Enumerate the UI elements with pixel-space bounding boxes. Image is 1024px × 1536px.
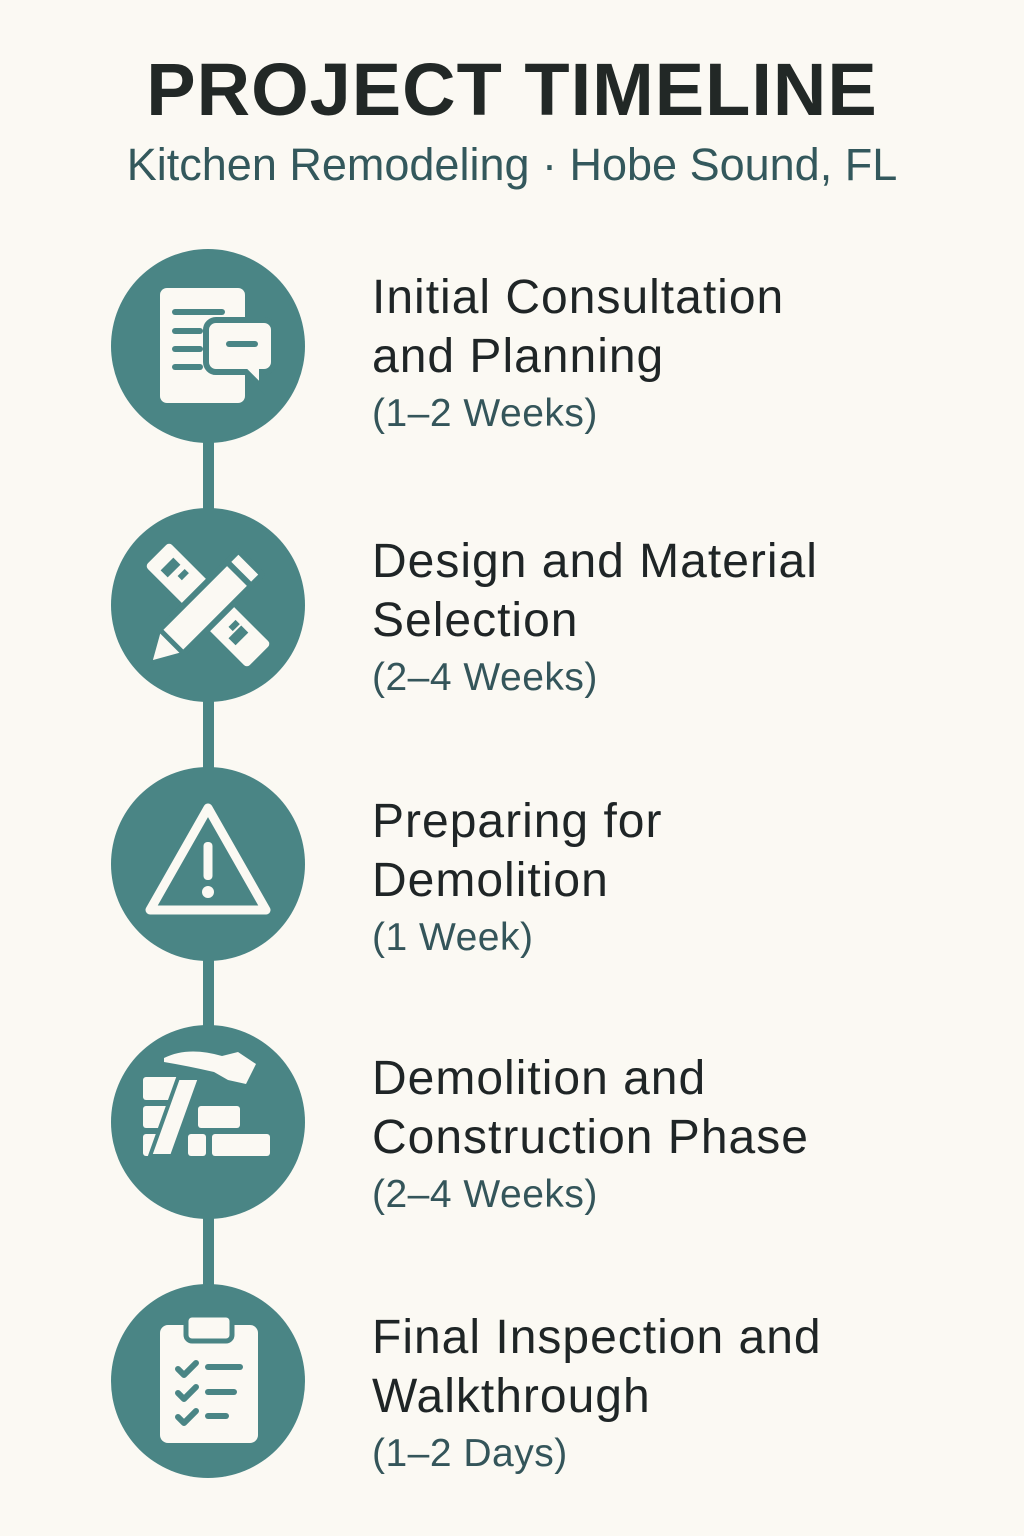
step 2 text: (2–4 Weeks) [372,656,598,699]
step 3 text: (1 Week) [372,916,534,959]
step 4 text: Construction Phase [372,1111,809,1164]
step 3 text: Preparing for [372,795,662,848]
step 1 text: and Planning [372,330,664,383]
connector line [203,400,214,1340]
step 1 text: Initial Consultation [372,271,784,324]
step 1 text [372,271,784,435]
subtitle: Kitchen Remodeling · Hobe Sound, FL [127,139,897,190]
step 2 text [372,535,818,699]
icon: hammer and bricks [111,1025,305,1219]
step 4 text [372,1052,809,1216]
step 2 text: Design and Material [372,535,818,588]
icon: consultation document [111,249,305,443]
step 5 text: (1–2 Days) [372,1432,568,1475]
icon: checklist clipboard [111,1284,305,1478]
icon: warning [111,767,305,961]
icon: ruler and pencil [111,508,305,702]
step 3 text [372,795,662,959]
title: PROJECT TIMELINE [146,48,878,131]
step 3 text: Demolition [372,854,609,907]
step 5 text: Final Inspection and [372,1311,822,1364]
step 4 text: Demolition and [372,1052,706,1105]
step 5 text: Walkthrough [372,1370,651,1423]
step 5 text [372,1311,822,1475]
step 2 text: Selection [372,594,578,647]
step 4 text: (2–4 Weeks) [372,1173,598,1216]
step 1 text: (1–2 Weeks) [372,392,598,435]
